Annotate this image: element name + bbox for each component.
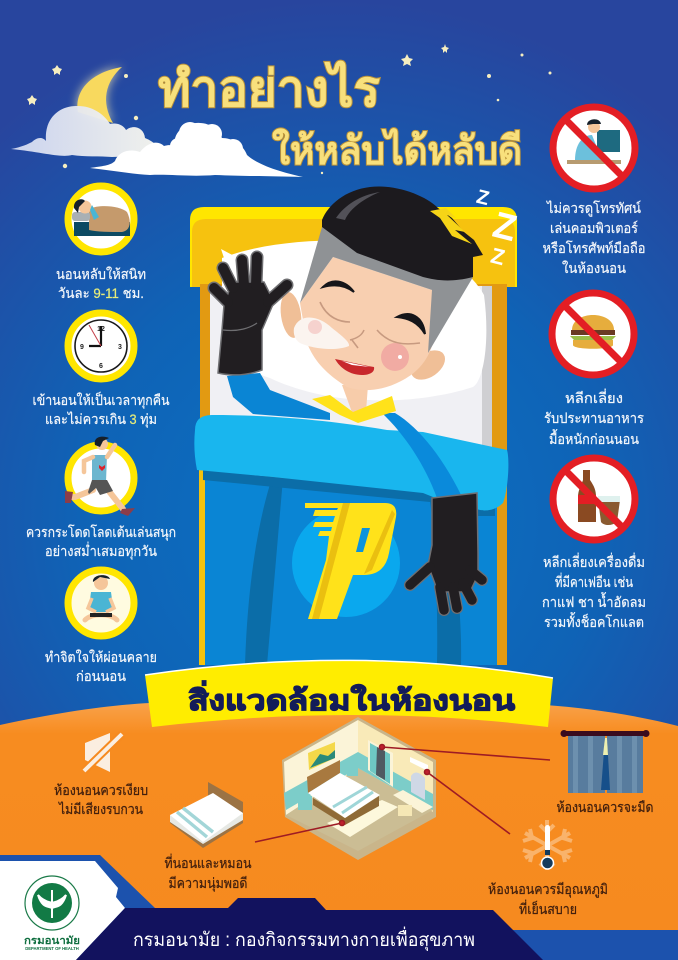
bed header bbox=[190, 207, 517, 287]
character: boy sleeping bbox=[278, 187, 483, 423]
logo: Department of Health: DEPARTMENT OF HEALTH bbox=[25, 946, 79, 951]
grey hair bbox=[300, 227, 473, 353]
text: avoid heavy meal bbox=[544, 389, 644, 447]
sleep Z letters: Z bbox=[489, 204, 521, 249]
sleep Z letters bbox=[474, 186, 521, 270]
text: cool bedroom: ที่เย็นสบาย bbox=[519, 900, 577, 917]
bed in room bbox=[307, 760, 340, 793]
desk and stool bbox=[393, 790, 433, 813]
text: avoid heavy meal: มื้อหนักก่อนนอน bbox=[549, 429, 639, 447]
blanket fold bbox=[194, 415, 508, 510]
text: exercise: ควรกระโดดโลดเต้นเล่นสนุก bbox=[26, 524, 176, 541]
icon: no television or computer bbox=[553, 107, 635, 189]
logo: P emblem bbox=[292, 503, 400, 619]
text: no screens: ในห้องนอน bbox=[562, 260, 626, 276]
nightstands bbox=[298, 796, 312, 810]
black hair bbox=[322, 187, 483, 280]
illustration: isometric bedroom bbox=[282, 717, 436, 860]
mattress sheet bbox=[210, 286, 492, 476]
text: bedding: ที่นอนและหมอน bbox=[164, 854, 252, 871]
panel: bed bbox=[190, 207, 517, 665]
text: bedtime bbox=[32, 391, 170, 428]
text: cool bedroom bbox=[488, 881, 608, 917]
text: relax: ทำจิตใจให้ผ่อนคลาย bbox=[45, 649, 157, 665]
stars bbox=[27, 44, 552, 174]
text: avoid caffeine: กาแฟ ชา น้ำอัดลม bbox=[542, 592, 646, 610]
icon: clock: 6 bbox=[99, 363, 103, 370]
blanket band bbox=[382, 413, 465, 503]
text: quiet bedroom: ไม่มีเสียงรบกวน bbox=[58, 801, 143, 817]
sleeve bbox=[227, 373, 330, 420]
text: bedding: มีความนุ่มพอดี bbox=[168, 875, 248, 892]
title: ให้หลับได้หลับดี bbox=[272, 128, 522, 173]
text: bedding bbox=[164, 854, 252, 892]
blanket shadow bbox=[203, 470, 495, 516]
logo: Department of Health: กรมอนามัย bbox=[24, 935, 80, 947]
ears bbox=[278, 291, 304, 339]
icon: curtains bbox=[560, 730, 650, 793]
picture bbox=[308, 742, 335, 770]
banner: bedroom environment: สิ่งแวดล้อมในห้องนอน bbox=[188, 680, 515, 716]
text: bedtime: และไม่ควรเกิน 3 ทุ่ม bbox=[45, 411, 157, 428]
text: quiet bedroom: ห้องนอนควรเงียบ bbox=[54, 782, 148, 798]
icon: no heavy meal bbox=[552, 293, 634, 375]
floor rug bbox=[327, 800, 398, 837]
moon and clouds bbox=[11, 67, 303, 177]
icon: clock: 9 bbox=[80, 344, 84, 351]
yellow hair streak bbox=[430, 208, 472, 244]
text: no screens: หรือโทรศัพท์มือถือ bbox=[542, 240, 646, 256]
banner: bedroom environment bbox=[145, 660, 553, 727]
eyelids and nose bbox=[320, 302, 420, 348]
icon: runner bbox=[65, 437, 135, 516]
icon: clock: 3 bbox=[118, 344, 122, 351]
text: sleep duration: วันละ 9-11 ชม. bbox=[58, 285, 144, 301]
text: quiet bedroom bbox=[54, 782, 148, 817]
footer: bottom band bbox=[0, 855, 678, 960]
text: sleep duration bbox=[56, 266, 146, 301]
text: exercise: อย่างสม่ำเสมอทุกวัน bbox=[45, 542, 157, 560]
neck bbox=[342, 385, 368, 415]
orange room ground bbox=[0, 703, 678, 960]
mouth bbox=[335, 359, 374, 375]
blue blanket bbox=[205, 480, 497, 665]
footer: bottom band: กรมอนามัย : กองกิจกรรมทางกายเพื่อสุขภาพ bbox=[133, 926, 475, 952]
text: exercise bbox=[26, 524, 176, 560]
sleep Z letters: Z bbox=[488, 243, 507, 270]
window and curtains bbox=[368, 740, 393, 787]
icon: sleeping person bbox=[68, 186, 134, 252]
icon: bed bbox=[170, 782, 243, 848]
collar bbox=[312, 395, 396, 423]
text: relax bbox=[45, 649, 157, 684]
icon: meditating person bbox=[68, 570, 134, 636]
text: sleep duration: นอนหลับให้สนิท bbox=[56, 266, 146, 282]
text: avoid caffeine bbox=[542, 553, 646, 630]
title bbox=[158, 60, 522, 173]
icon: clock: 12 bbox=[97, 326, 105, 333]
eyebrows bbox=[323, 281, 354, 292]
air conditioner bbox=[410, 757, 428, 771]
glove: lower right hand bbox=[410, 493, 482, 610]
text: avoid caffeine: รวมทั้งช็อคโกแลต bbox=[544, 612, 644, 630]
text: dark bedroom: ห้องนอนควรจะมืด bbox=[556, 799, 654, 815]
text: no screens: เล่นคอมพิวเตอร์ bbox=[550, 220, 638, 236]
text: avoid heavy meal: หลีกเลี่ยง bbox=[565, 389, 623, 406]
sleep Z letters: Z bbox=[474, 186, 491, 210]
text: bedtime: เข้านอนให้เป็นเวลาทุกคืน bbox=[32, 391, 170, 409]
text: avoid caffeine: หลีกเลี่ยงเครื่องดื่ม bbox=[543, 553, 645, 570]
title: ทำอย่างไร bbox=[158, 60, 380, 117]
text: no screens bbox=[542, 200, 646, 276]
text: relax: ก่อนนอน bbox=[76, 668, 126, 684]
icon: muted speaker bbox=[84, 733, 122, 772]
face bbox=[300, 257, 433, 390]
icon: no caffeine bbox=[553, 458, 635, 540]
logo: Department of Health bbox=[24, 876, 80, 951]
icon: cold thermometer bbox=[523, 820, 572, 870]
red cheek bbox=[381, 343, 409, 371]
text: avoid caffeine: ที่มีคาเฟอีน เช่น bbox=[555, 573, 633, 590]
text: cool bedroom: ห้องนอนควรมีอุณหภูมิ bbox=[488, 881, 608, 898]
white cheek bbox=[294, 317, 349, 349]
text: no screens: ไม่ควรดูโทรทัศน์ bbox=[546, 200, 641, 217]
bed frame sides bbox=[200, 284, 507, 484]
mirror bbox=[411, 772, 425, 800]
pillow bbox=[222, 240, 486, 400]
text: avoid heavy meal: รับประทานอาหาร bbox=[544, 410, 644, 426]
icon: clock bbox=[68, 313, 134, 379]
glove: raised left hand bbox=[214, 257, 287, 375]
callout lines bbox=[255, 744, 550, 842]
